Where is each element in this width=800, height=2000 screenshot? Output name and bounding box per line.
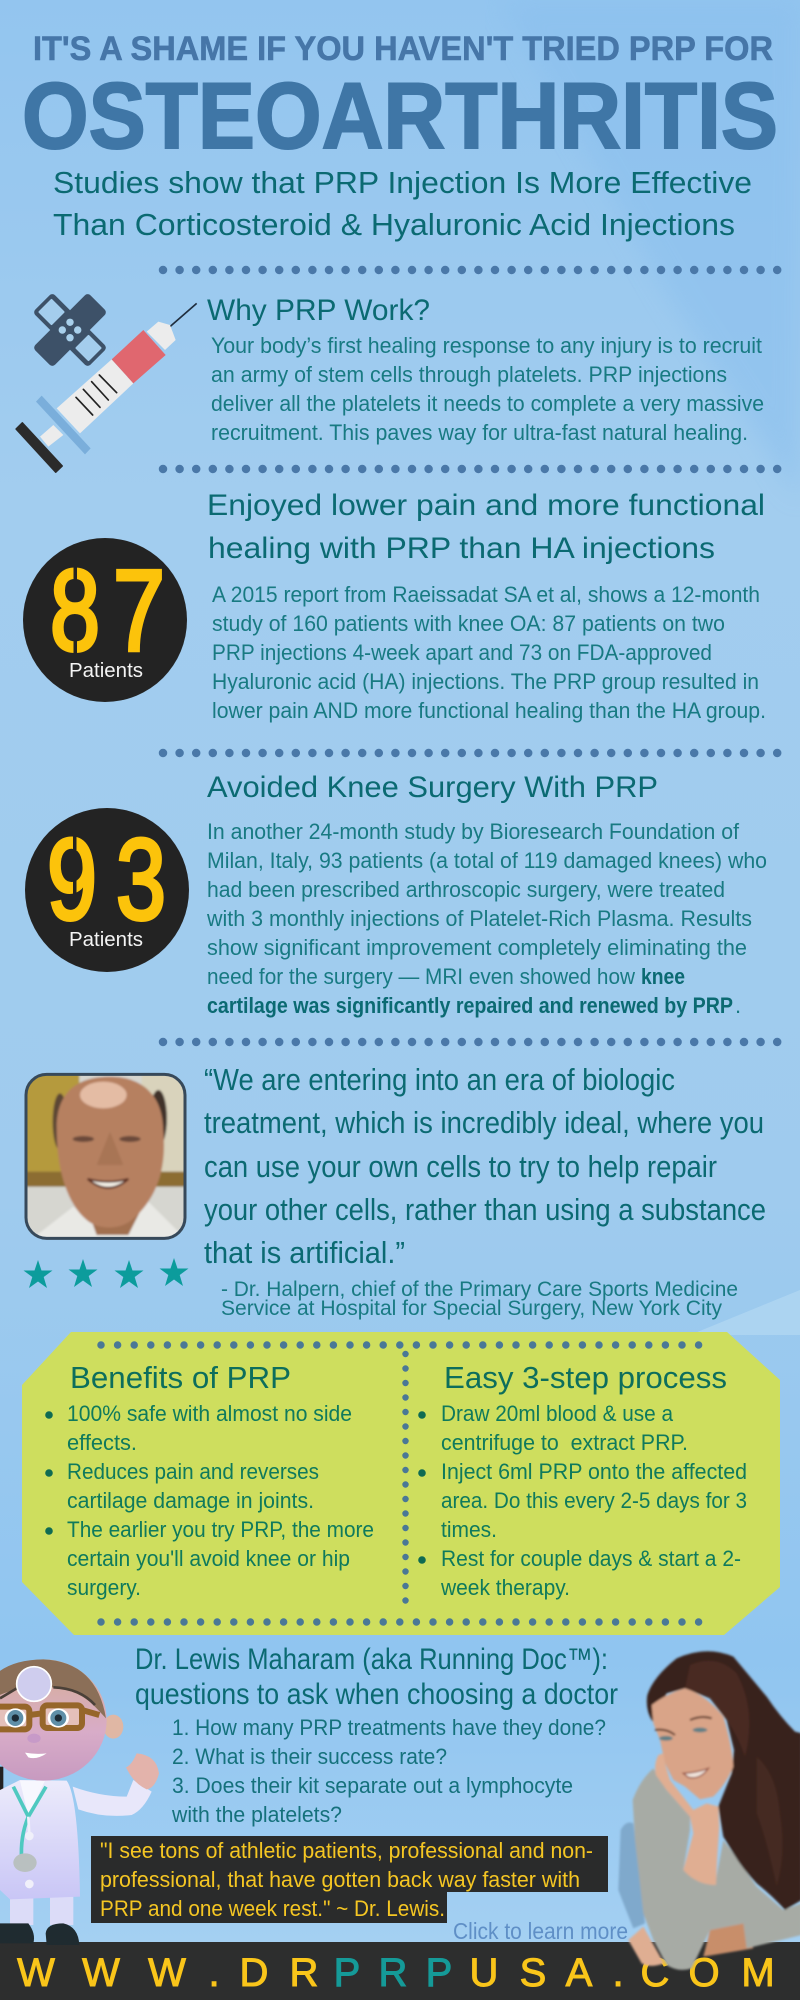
body text: study of 160 patients with knee OA: 87 patients on two xyxy=(212,611,725,636)
section: lower pain xyxy=(207,489,766,723)
benefits column: Reduces pain and reverses xyxy=(67,1459,319,1484)
body text: had been prescribed arthroscopic surgery, were treated xyxy=(207,877,725,902)
process column: area. Do this every 2-5 days for 3 xyxy=(441,1488,747,1513)
body text: Your body’s first healing response to any injury is to recruit xyxy=(211,333,762,358)
heading: healing with PRP than HA injections xyxy=(208,532,715,565)
testimonial quote: can use your own cells to try to help repair xyxy=(204,1150,717,1184)
benefits column: cartilage damage in joints. xyxy=(67,1488,314,1513)
body text: A 2015 report from Raeissadat SA et al, shows a 12-month xyxy=(212,582,760,607)
process column: centrifuge to extract PRP. xyxy=(441,1430,688,1455)
body text: lower pain AND more functional healing than the HA group. xyxy=(212,698,766,723)
process column: Rest for couple days & start a 2- xyxy=(441,1546,741,1571)
doctor photo xyxy=(23,1071,188,1242)
testimonial quote: that is artificial.” xyxy=(204,1236,405,1270)
stat badge: 87 patients xyxy=(23,538,187,702)
benefits column: effects. xyxy=(67,1430,137,1455)
benefits column: certain you'll avoid knee or hip xyxy=(67,1546,350,1571)
testimonial quote xyxy=(204,1063,766,1270)
heading: questions to ask: questions to ask when choosing a doctor xyxy=(135,1678,618,1711)
title line: it's a shame: IT'S A SHAME IF YOU HAVEN'T TRIED PRP FOR xyxy=(33,30,773,68)
link text: Click to learn more xyxy=(453,1918,628,1944)
footer bar: website xyxy=(0,1942,800,2000)
body text: Milan, Italy, 93 patients (a total of 119 damaged knees) who xyxy=(207,848,767,873)
section: why PRP works xyxy=(207,294,764,445)
panel: benefits and process xyxy=(22,1332,780,1635)
question list: 1. How many PRP treatments have they done? xyxy=(172,1715,606,1740)
section: avoided knee surgery xyxy=(206,771,767,1018)
stat badge: 87 patients: 8 xyxy=(50,547,100,675)
quote bar: Dr. Lewis xyxy=(91,1836,608,1923)
body text: . xyxy=(735,993,741,1018)
process column: week therapy. xyxy=(440,1575,570,1600)
question list xyxy=(171,1715,606,1827)
quote attribution xyxy=(221,1278,738,1320)
stat badge: 93 patients: 3 xyxy=(116,816,166,944)
stat badge: 93 patients xyxy=(25,808,189,972)
benefits column: The earlier you try PRP, the more xyxy=(67,1517,374,1542)
question list: with the platelets? xyxy=(171,1802,342,1827)
icon: bandage xyxy=(33,293,107,367)
body text: deliver all the platelets it needs to complete a very massive xyxy=(211,391,764,416)
heading xyxy=(207,489,765,565)
subtitle: Studies show that PRP Injection Is More Effective xyxy=(53,166,752,200)
body text: cartilage was significantly repaired and renewed by PRP xyxy=(207,993,733,1018)
subtitle: Than Corticosteroid & Hyaluronic Acid Injections xyxy=(53,208,735,242)
quote attribution: Service at Hospital for Special Surgery, New York City xyxy=(221,1297,722,1320)
quote bar: Dr. Lewis: professional, that have gotten back way faster with xyxy=(100,1867,580,1892)
icon: syringe xyxy=(16,303,197,472)
body text: show significant improvement completely eliminating the xyxy=(207,935,747,960)
benefits column: surgery. xyxy=(67,1575,141,1600)
benefits column: 100% safe with almost no side xyxy=(67,1401,352,1426)
stat badge: 93 patients: Patients xyxy=(69,928,143,951)
stat badge: 93 patients: 9 xyxy=(47,816,97,944)
body text: with 3 monthly injections of Platelet-Rich Plasma. Results xyxy=(206,906,752,931)
benefits column xyxy=(45,1360,374,1600)
heading: Why PRP Work? xyxy=(207,294,430,327)
question list: 2. What is their success rate? xyxy=(172,1744,447,1769)
question list: 3. Does their kit separate out a lymphocyte xyxy=(172,1773,573,1798)
stat badge: 87 patients: 7 xyxy=(113,547,165,675)
illustration: woman xyxy=(618,1651,800,1970)
star rating xyxy=(24,1258,188,1288)
title xyxy=(22,30,778,168)
process column: times. xyxy=(441,1517,497,1542)
body text: Hyaluronic acid (HA) injections. The PRP group resulted in xyxy=(212,669,759,694)
body text: an army of stem cells through platelets. PRP injections xyxy=(211,362,727,387)
process column xyxy=(418,1360,747,1600)
testimonial quote: “We are entering into an era of biologic xyxy=(204,1063,675,1097)
footer bar: website: WWW.DR xyxy=(17,1951,318,1995)
process column: Draw 20ml blood & use a xyxy=(441,1401,674,1426)
heading: Avoided Knee Surgery With PRP xyxy=(207,771,658,804)
body text: recruitment. This paves way for ultra-fast natural healing. xyxy=(211,420,748,445)
body text xyxy=(212,582,766,723)
process column: Easy 3-step process xyxy=(444,1360,727,1395)
body text: knee xyxy=(641,964,685,989)
quote bar: Dr. Lewis: "I see tons of athletic patients, professional and non- xyxy=(100,1838,593,1863)
body text: PRP injections 4-week apart and 73 on FDA-approved xyxy=(212,640,712,665)
heading: Enjoyed lower pain and more functional xyxy=(207,489,765,522)
footer bar: website: PRP xyxy=(334,1951,452,1995)
heading: questions to ask xyxy=(135,1643,618,1711)
benefits column: Benefits of PRP xyxy=(70,1360,291,1395)
heading: questions to ask: Dr. Lewis Maharam (aka Running Doc™): xyxy=(135,1643,608,1676)
subtitle xyxy=(53,166,752,242)
body text xyxy=(206,819,767,1018)
quote attribution: - Dr. Halpern, chief of the Primary Care Sports Medicine xyxy=(221,1278,738,1301)
footer bar: website: USA.COM xyxy=(470,1951,775,1995)
body text: In another 24-month study by Bioresearch Foundation of xyxy=(207,819,740,844)
body text: need for the surgery — MRI even showed how xyxy=(207,964,635,989)
illustration: cartoon doctor xyxy=(0,1659,159,1945)
body text xyxy=(211,333,764,445)
quote bar: Dr. Lewis: PRP and one week rest." ~ Dr. Lewis. xyxy=(100,1896,445,1921)
stat badge: 87 patients: Patients xyxy=(69,659,143,682)
process column: Inject 6ml PRP onto the affected xyxy=(441,1459,747,1484)
